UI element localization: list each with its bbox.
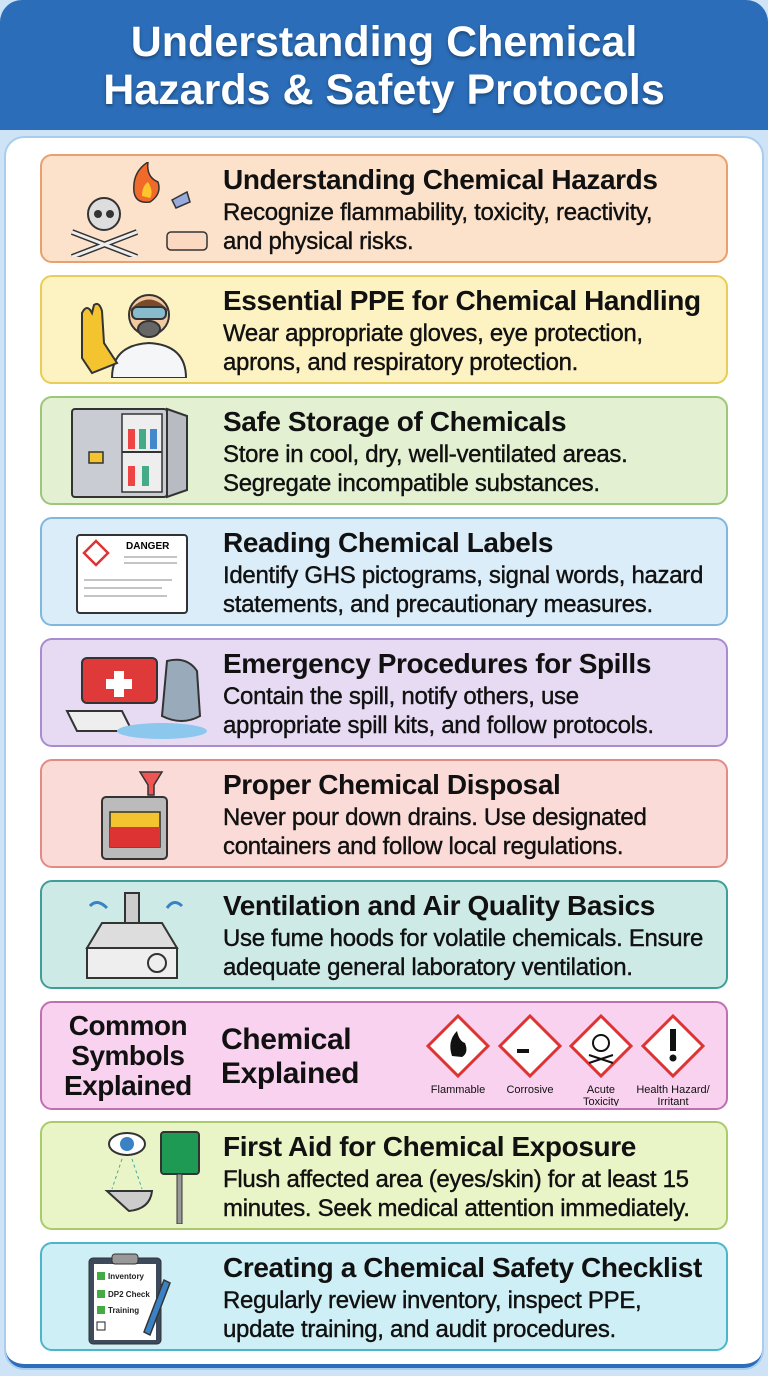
heading: Ventilation and Air Quality Basics [223, 890, 655, 921]
heading: First Aid for Chemical Exposure [223, 1131, 636, 1162]
panel: PPE [40, 275, 728, 384]
icon: eyewash and shower sign [104, 1131, 200, 1224]
panel: ventilation [40, 880, 728, 989]
heading: Emergency Procedures for Spills [223, 648, 651, 679]
text: Identify GHS pictograms, signal words, hazard [223, 562, 703, 589]
heading: Essential PPE for Chemical Handling [223, 285, 701, 316]
text: Flush affected area (eyes/skin) for at least 15 [223, 1166, 689, 1193]
panel: labels [40, 517, 728, 626]
icon: disposal container [101, 771, 168, 860]
pictograms: Health Hazard/ [636, 1084, 711, 1096]
text: Store in cool, dry, well-ventilated areas. [223, 441, 627, 468]
icon: fume hood [85, 892, 183, 979]
pictograms: Acute [587, 1084, 615, 1096]
text: minutes. Seek medical attention immediately. [223, 1195, 690, 1222]
icon: clipboard: Training [108, 1306, 139, 1315]
icon: clipboard: Inventory [108, 1272, 145, 1281]
text: Wear appropriate gloves, eye protection, [223, 320, 643, 347]
panel: first aid [40, 1121, 728, 1230]
title: Hazards & Safety Protocols [103, 66, 665, 114]
icon: GHS label [76, 534, 188, 614]
text [223, 804, 647, 860]
text: appropriate spill kits, and follow protocols. [223, 712, 654, 739]
text: Segregate incompatible substances. [223, 470, 600, 497]
pictograms: Corrosive [506, 1084, 554, 1096]
text [223, 562, 703, 618]
icon: person with PPE [81, 294, 187, 378]
text [223, 441, 627, 497]
heading: common symbols [64, 1010, 192, 1101]
icon: clipboard [88, 1254, 171, 1344]
text [223, 925, 703, 981]
heading: Understanding Chemical Hazards [223, 164, 658, 195]
heading: Safe Storage of Chemicals [223, 406, 566, 437]
heading: common symbols: Explained [64, 1070, 192, 1101]
text [222, 320, 643, 376]
heading: common symbols: Symbols [71, 1040, 184, 1071]
text [223, 1287, 641, 1343]
text: Recognize flammability, toxicity, reactivity, [223, 199, 652, 226]
panel: symbols [40, 1001, 728, 1110]
title: Understanding Chemical [131, 18, 637, 66]
icon: skull and flame [71, 162, 208, 257]
icon: spill kit [65, 657, 207, 739]
pictograms: Flammable [431, 1084, 485, 1096]
text [223, 683, 654, 739]
panel: spills [40, 638, 728, 747]
panel: hazards [40, 154, 728, 263]
heading: Creating a Chemical Safety Checklist [223, 1252, 702, 1283]
text: Regularly review inventory, inspect PPE, [223, 1287, 641, 1314]
text: statements, and precautionary measures. [223, 591, 653, 618]
text [223, 199, 652, 255]
panel: disposal [40, 759, 728, 868]
heading: Proper Chemical Disposal [223, 769, 560, 800]
icon: GHS label: DANGER [126, 541, 170, 552]
text [223, 1166, 690, 1222]
text: containers and follow local regulations. [223, 833, 623, 860]
heading: common symbols: Common [69, 1010, 187, 1041]
heading: chemical explained: Explained [221, 1057, 359, 1090]
panel: storage [40, 396, 728, 505]
pictograms [426, 1014, 711, 1106]
text: Never pour down drains. Use designated [223, 804, 647, 831]
heading: chemical explained [221, 1023, 359, 1090]
title [0, 0, 768, 130]
text: Contain the spill, notify others, use [223, 683, 579, 710]
text: adequate general laboratory ventilation. [223, 954, 633, 981]
heading: Reading Chemical Labels [223, 527, 553, 558]
text: aprons, and respiratory protection. [223, 349, 578, 376]
text: update training, and audit procedures. [223, 1316, 616, 1343]
icon: storage cabinet [71, 408, 188, 498]
text: and physical risks. [223, 228, 413, 255]
icon: clipboard: DP2 Check [108, 1290, 150, 1299]
panel: checklist [40, 1242, 728, 1351]
text: Use fume hoods for volatile chemicals. Ensure [223, 925, 703, 952]
heading: chemical explained: Chemical [221, 1023, 351, 1056]
